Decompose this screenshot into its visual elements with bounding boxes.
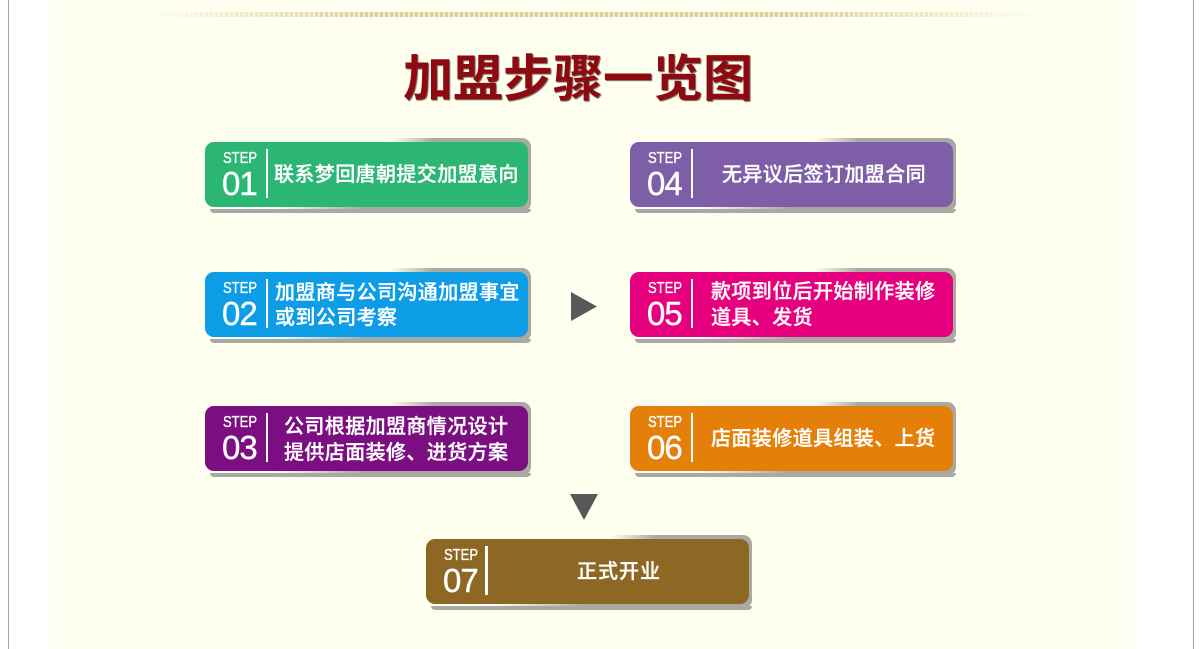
arrow: right [571,292,597,321]
step 05 card: STEP [648,280,682,297]
step 03 card: 03 [222,429,257,466]
step 02 card: 加盟商与公司沟通加盟事宜 [275,282,520,304]
step 04 card: STEP [648,150,682,167]
step 07 card: STEP [444,547,478,564]
title: 加盟步骤一览图 [403,51,753,107]
step 01 card: 联系梦回唐朝提交加盟意向 [274,164,519,186]
step 06 card [630,402,956,477]
step 02 card: 或到公司考察 [275,307,397,329]
step 03 card: 提供店面装修、进货方案 [284,442,508,464]
decorative top ornament band [145,12,1045,17]
step 05 card: 05 [647,295,682,332]
step 05 card: 款项到位后开始制作装修 [711,281,935,303]
step 04 card: 无异议后签订加盟合同 [722,164,926,186]
step 03 card: STEP [222,414,257,431]
step 04 card: 04 [647,165,682,202]
step 02 card: STEP [222,280,257,297]
step 07 card: 正式开业 [577,561,661,583]
page border left [8,0,9,649]
step 05 card [630,268,956,343]
step 06 card: 06 [647,429,682,466]
step 01 card: 01 [222,165,257,202]
step 05 card: 道具、发货 [711,307,813,329]
page border right [1193,0,1194,649]
step 03 card [205,402,531,477]
step 07 card: 07 [443,562,478,599]
step 04 card [630,138,956,213]
step 06 card: STEP [648,414,682,431]
step 02 card [205,268,531,343]
step 03 card: 公司根据加盟商情况设计 [284,416,508,438]
step 02 card: 02 [222,295,257,332]
step 01 card [205,138,531,213]
step 01 card: STEP [222,150,257,167]
step 07 card [426,535,752,610]
arrow: down [570,494,598,520]
step 06 card: 店面装修道具组装、上货 [711,428,935,450]
